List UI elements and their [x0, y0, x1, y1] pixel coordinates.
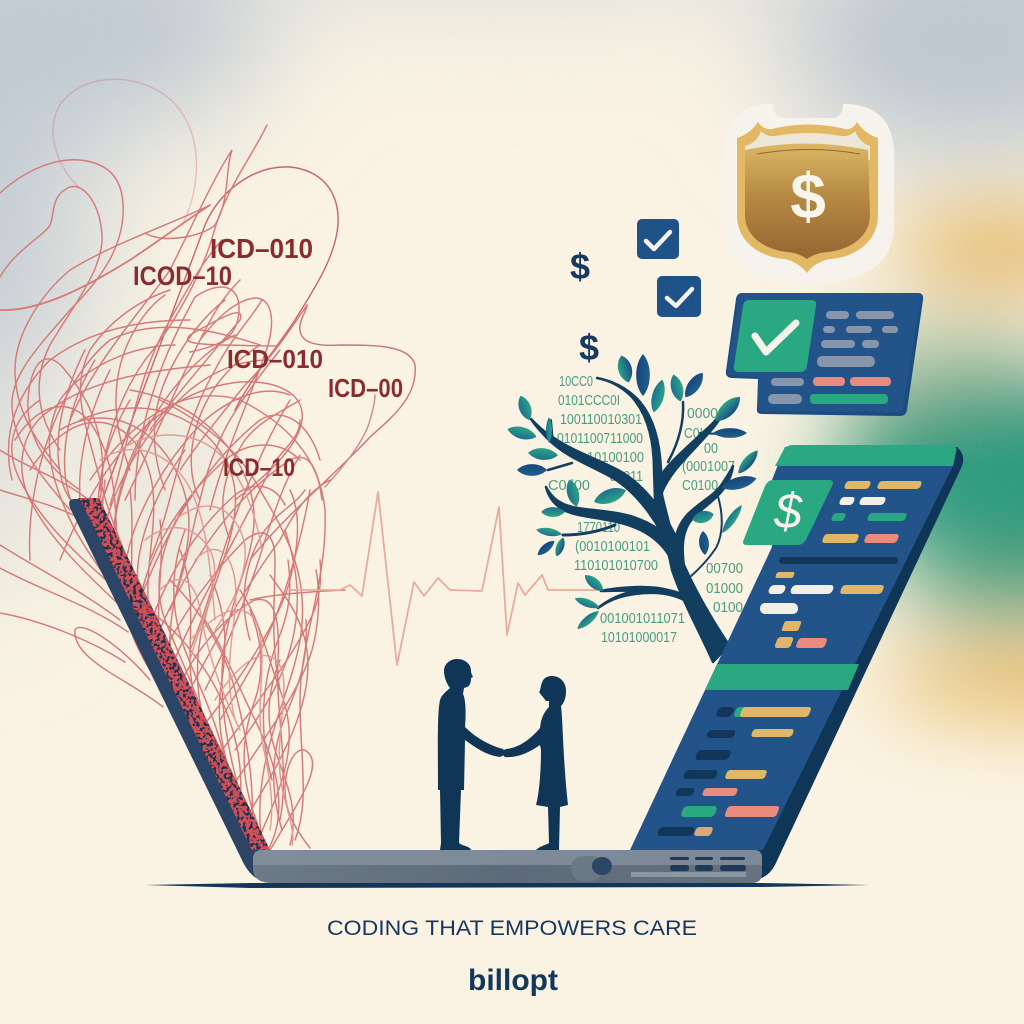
card body — [726, 293, 923, 416]
man — [438, 659, 506, 850]
binary digits around the tree: C0 l00 — [548, 478, 590, 494]
ICD code labels: ICD–010 — [227, 344, 323, 374]
binary digits around the tree: (0001007 — [682, 459, 735, 475]
code bars lower — [656, 707, 812, 836]
shield gold face — [745, 144, 870, 259]
dollar icon one: $ — [570, 246, 590, 287]
woman — [500, 676, 568, 850]
card data bars — [768, 311, 898, 404]
tagline: CODING THAT EMPOWERS CARE — [327, 917, 697, 940]
left laptop screen: dark bezel and corrupted red display — [69, 498, 270, 879]
ICD code labels: ICD–010 — [210, 233, 313, 264]
screen edge — [745, 447, 963, 880]
badge backing — [723, 104, 894, 283]
silhouette: two people shaking hands — [438, 659, 568, 850]
tree twigs — [548, 402, 722, 578]
binary digits around the tree: J1011 — [610, 469, 643, 485]
power button — [592, 857, 612, 875]
shield dollar sign: $ — [790, 160, 826, 232]
binary digits around the tree: C0100 — [682, 478, 718, 494]
screen green header — [775, 445, 956, 466]
ICD code labels — [133, 233, 403, 482]
tree — [506, 354, 761, 662]
ICD code labels: ICD–00 — [328, 373, 403, 403]
binary digits around the tree: 0101100711000 — [557, 431, 643, 447]
binary digits around the tree: 10100100 — [587, 450, 644, 466]
tree trunk and branches — [531, 378, 733, 662]
binary digits around the tree: C0I — [684, 426, 703, 442]
binary digits around the tree: 001001011071 — [600, 611, 685, 627]
dollar pane — [743, 480, 833, 545]
binary digits around the tree: 01000 — [706, 581, 743, 597]
checkbox icon one — [637, 219, 679, 259]
vents — [670, 857, 746, 871]
screen body — [630, 447, 955, 850]
binary digits around the tree: 0101CCC0I — [558, 393, 620, 409]
approval card — [726, 293, 923, 416]
right laptop screen — [630, 445, 963, 880]
binary digits around the tree: 0000 — [687, 406, 718, 422]
binary digits around the tree — [548, 374, 743, 646]
ICD code labels: ICOD–10 — [133, 261, 232, 291]
binary digits around the tree: 00700 — [706, 561, 743, 577]
dollar pane: $ — [773, 483, 803, 539]
binary digits around the tree: 10101000017 — [601, 630, 677, 646]
binary digits around the tree: 100110010301 — [560, 412, 642, 428]
trackpad pill — [571, 856, 603, 881]
tree leaves — [506, 354, 761, 632]
binary digits around the tree: 1770110 — [577, 520, 620, 536]
speaker strip — [631, 872, 746, 877]
binary digits around the tree: 00 — [704, 441, 718, 457]
green divider band — [705, 664, 859, 690]
card green check pane — [734, 300, 816, 372]
ICD code labels: ICD–10 — [223, 454, 295, 482]
dollar icon two: $ — [579, 327, 599, 368]
heartbeat line — [285, 492, 603, 665]
shield badge — [723, 104, 894, 283]
red tangled code lines — [0, 79, 415, 850]
laptop base — [253, 850, 762, 883]
ground shadow — [145, 883, 870, 888]
binary digits around the tree: 0100 — [713, 600, 743, 616]
checkbox icon two — [657, 276, 701, 317]
binary digits around the tree: 10CC0 — [559, 374, 593, 390]
binary digits around the tree: 110101010700 — [574, 558, 658, 574]
logo: billopt — [468, 964, 558, 997]
shield inner highlight — [745, 131, 870, 160]
shield border — [737, 122, 878, 273]
code bars upper — [760, 481, 922, 648]
grey haze behind the tangled lines — [85, 380, 245, 620]
binary digits around the tree: (0010100101 — [575, 539, 650, 555]
